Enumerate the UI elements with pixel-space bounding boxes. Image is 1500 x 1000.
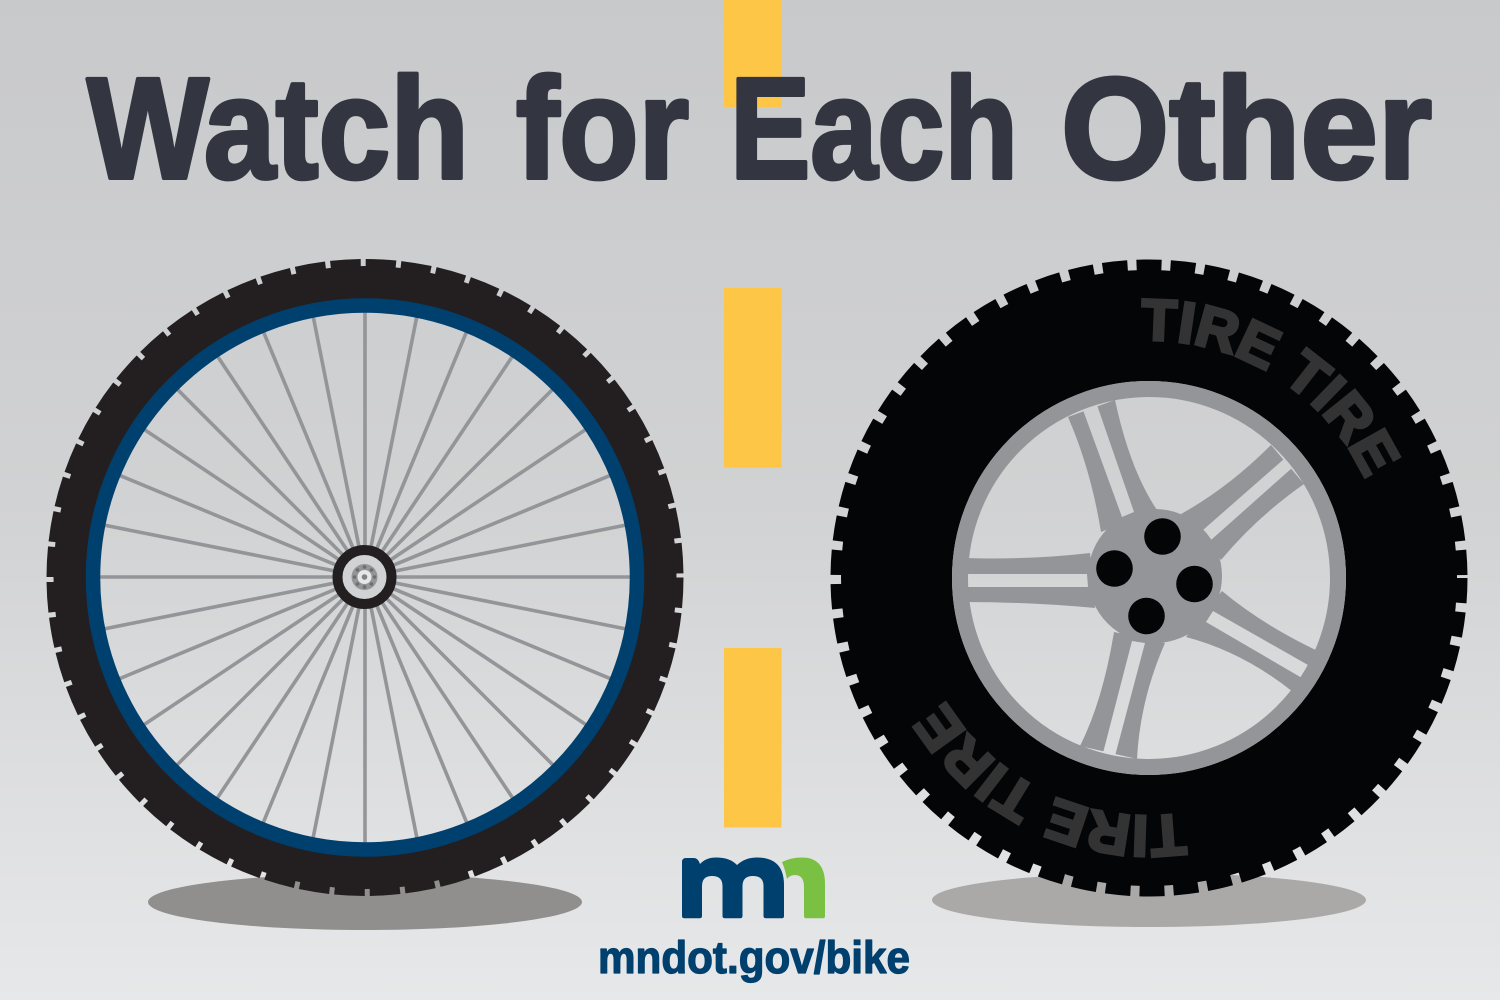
- car tire tread blocks: [837, 266, 1461, 890]
- car wheel shadow: [932, 873, 1366, 927]
- tire lettering bottom: TIRE TIRE: [912, 700, 1188, 858]
- wheel hub: [1088, 509, 1222, 643]
- bike spokes: [98, 310, 632, 844]
- title: Watch: [87, 48, 469, 209]
- bike tire: [70, 282, 660, 872]
- alloy spokes: [965, 400, 1322, 759]
- title: [87, 48, 1432, 209]
- title: for: [516, 48, 689, 209]
- spoke slots: [968, 405, 1308, 756]
- tire lettering top: TIRE TIRE: [1141, 298, 1402, 480]
- alloy rim: [960, 389, 1338, 767]
- title: Other: [1061, 48, 1432, 209]
- bicycle wheel: [50, 263, 680, 892]
- title: Each: [730, 48, 1018, 209]
- bike wheel shadow: [148, 874, 582, 930]
- website address: mndot.gov/bike: [598, 932, 910, 983]
- road centre line dashes: [724, 0, 782, 828]
- car wheel: [830, 260, 1468, 896]
- bike tire tread knobs: [50, 263, 680, 892]
- bike hub: [338, 550, 392, 604]
- MnDOT logo: [682, 858, 825, 918]
- logo m: [682, 858, 784, 918]
- logo n: [782, 858, 825, 918]
- bike rim: [93, 306, 637, 850]
- lug nuts: [1096, 518, 1213, 634]
- car tire: [896, 326, 1402, 830]
